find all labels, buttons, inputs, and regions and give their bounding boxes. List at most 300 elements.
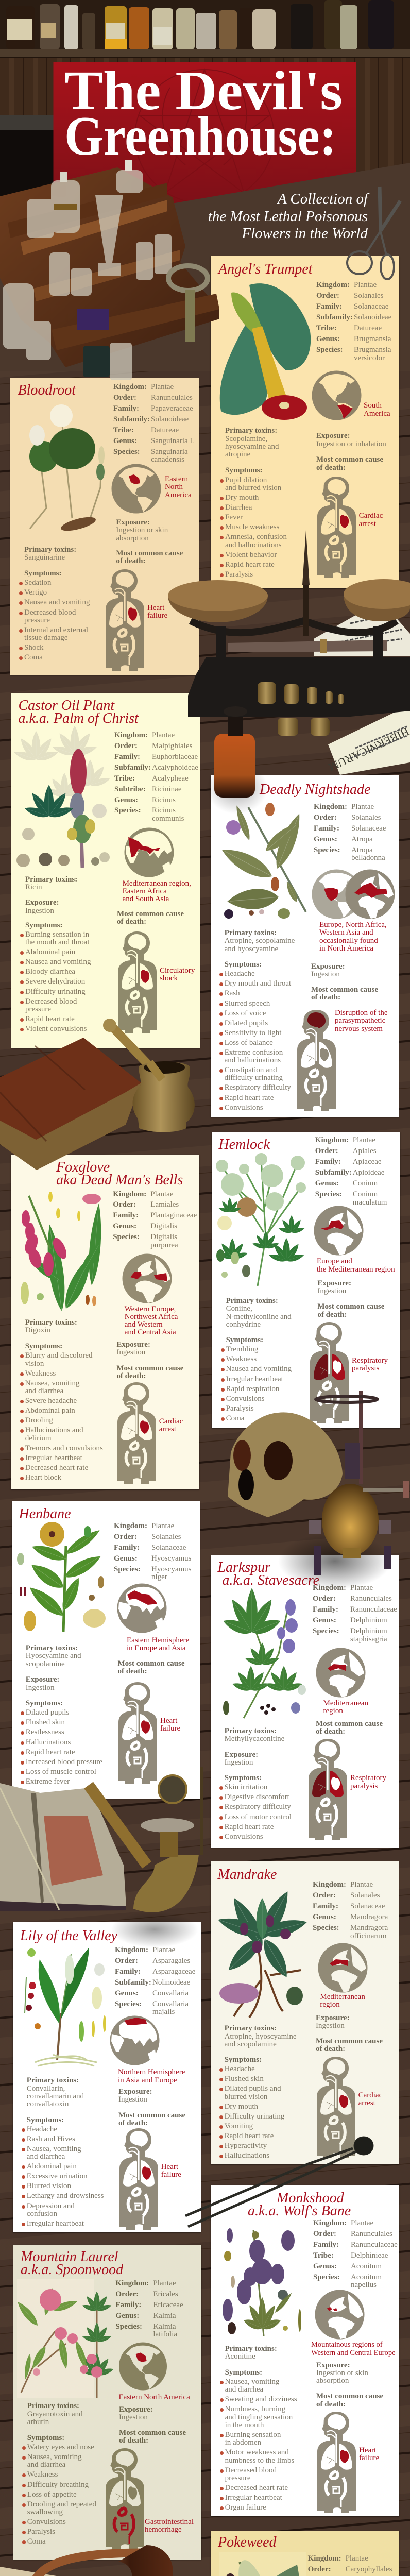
taxonomy: Species:: [115, 2000, 142, 2008]
primary toxins: scopolamine: [26, 1660, 65, 1668]
icon: scissors: [347, 187, 400, 279]
panel: tilted plank table: [0, 163, 410, 371]
region label: and South Asia: [123, 895, 169, 903]
exposure: Exposure:: [316, 2361, 350, 2369]
symptoms: [225, 2369, 297, 2514]
region label: occasionally found: [319, 937, 378, 945]
primary toxins: Primary toxins:: [225, 2024, 277, 2032]
exposure: [118, 2088, 152, 2104]
body diagram: heart: [106, 569, 144, 671]
symptoms: in abdomen: [225, 2438, 261, 2447]
exposure: [316, 2362, 368, 2385]
cause label: arrest: [159, 1425, 176, 1433]
primary toxins: Primary toxins:: [225, 2345, 277, 2353]
cause label: [359, 512, 383, 528]
cause label: nervous system: [335, 1025, 383, 1033]
symptoms: Respiratory difficulty: [225, 1083, 291, 1092]
symptoms: Rapid heart rate: [225, 1823, 274, 1831]
symptoms: [25, 1343, 103, 1484]
symptoms: Hallucinations and: [25, 1426, 83, 1434]
symptoms: Rapid respiration: [226, 1385, 279, 1393]
symptoms: Depression and: [27, 2202, 75, 2210]
taxonomy: Hyoscyamus: [151, 1565, 192, 1573]
primary toxins: Sanguinarine: [24, 553, 65, 562]
cause label: Gastrointestinal: [145, 2517, 194, 2526]
primary toxins: Primary toxins:: [27, 2076, 79, 2084]
taxonomy: Order:: [115, 2290, 139, 2298]
body diagram: lungs: [310, 1322, 349, 1423]
plant illustration: mountain laurel: [17, 2279, 111, 2398]
cause label: Heart: [161, 2163, 178, 2171]
taxonomy: maculatum: [353, 1198, 387, 1207]
taxonomy: Species:: [314, 846, 340, 854]
primary toxins: [226, 1297, 292, 1329]
symptoms: Nausea, vomiting: [25, 1379, 80, 1387]
region label: Eastern: [165, 475, 188, 483]
taxonomy: Order:: [114, 742, 138, 750]
symptoms: Drooling: [25, 1416, 53, 1425]
taxonomy: [113, 383, 195, 464]
taxonomy: Order:: [115, 1957, 138, 1965]
region label: Mediterranean: [323, 1699, 368, 1707]
taxonomy: Digitalis: [150, 1222, 177, 1230]
primary toxins: Grayanotoxin and: [27, 2410, 83, 2418]
taxonomy: Ranunculaceae: [350, 1605, 397, 1614]
cause label: [359, 2447, 379, 2463]
cause label: Cardiac: [359, 512, 383, 520]
symptoms: in the mouth: [225, 2421, 264, 2429]
primary toxins: Methyllycaconitine: [225, 1735, 284, 1743]
region label: Western and Central Europe: [311, 2349, 396, 2357]
cause label: paralysis: [350, 1782, 378, 1790]
cause label: shock: [160, 974, 178, 982]
region label: in North America: [319, 944, 373, 953]
symptoms: and diarrhea: [27, 2461, 65, 2469]
taxonomy: napellus: [351, 2281, 377, 2289]
region label: Mountainous regions of: [311, 2341, 383, 2349]
taxonomy: Plantae: [350, 1584, 373, 1592]
decorative paper under nightshade panel: HIBERNICARUM: [327, 725, 410, 774]
cause of death heading: Most common cause: [311, 986, 378, 994]
cause of death heading: of death:: [118, 2119, 148, 2127]
primary toxins: [225, 427, 279, 459]
globe: Mediterranean: [318, 1943, 368, 1993]
taxonomy: staphisagria: [350, 1635, 387, 1643]
taxonomy: Family:: [114, 1544, 140, 1552]
cause label: parasympathetic: [335, 1016, 385, 1025]
panel: Deadly Nightshade: [211, 775, 399, 1117]
taxonomy: Order:: [113, 1200, 136, 1209]
exposure: [316, 432, 386, 448]
symptoms: Flushed skin: [26, 1718, 65, 1726]
region label: Eastern Africa: [123, 887, 167, 895]
taxonomy: Order:: [314, 814, 337, 822]
taxonomy: Tribe:: [316, 324, 337, 332]
cause label: Respiratory: [352, 1357, 388, 1365]
symptoms: Nausea, vomiting: [225, 2378, 279, 2386]
panel: Mandrake: [211, 1861, 399, 2164]
taxonomy: Kingdom:: [308, 2554, 341, 2563]
cause of death heading: [116, 549, 183, 565]
photo: wooden lab rack with glassware: [0, 160, 219, 380]
taxonomy: Apioideae: [353, 1168, 384, 1177]
cause label: [350, 1774, 386, 1790]
taxonomy: Datureae: [151, 426, 179, 434]
taxonomy: Order:: [113, 394, 136, 402]
symptoms: Vertigo: [24, 588, 47, 597]
heading: Bloodroot: Bloodroot: [18, 382, 76, 398]
exposure: Ingestion: [316, 2022, 345, 2030]
panel: Pokeweed: [211, 2531, 399, 2576]
taxonomy: Ericaceae: [153, 2301, 183, 2309]
globe: Mediterranean, Africa, South Asia: [125, 827, 174, 877]
heading: Pokeweed: Pokeweed: [218, 2534, 276, 2550]
taxonomy: Kingdom:: [113, 1190, 146, 1198]
taxonomy: Family:: [115, 2301, 141, 2309]
taxonomy: Apiales: [353, 1147, 377, 1155]
taxonomy: Order:: [316, 292, 339, 300]
taxonomy: Caryophyllales: [346, 2565, 392, 2573]
taxonomy: Plantaginaceae: [150, 1211, 197, 1219]
symptoms: Pupil dilation: [225, 476, 267, 484]
cause label: [145, 2518, 194, 2534]
taxonomy: Family:: [313, 2241, 339, 2249]
cause of death heading: of death:: [316, 2400, 346, 2409]
region label: and Western: [125, 1320, 163, 1329]
body diagram: heart: [118, 1682, 157, 1784]
region label: [323, 1699, 368, 1715]
plant illustration: larkspur: [217, 1592, 310, 1719]
body diagram: heart: [119, 2128, 158, 2230]
exposure: Exposure:: [311, 962, 345, 971]
region label: [125, 1306, 178, 1337]
photo: old book: [0, 1038, 141, 1170]
taxonomy: Plantae: [354, 281, 377, 289]
taxonomy: Atropa: [351, 846, 373, 854]
symptoms: Nausea, vomiting: [27, 2145, 81, 2153]
cause of death heading: [316, 2038, 383, 2054]
primary toxins: and scopolamine: [225, 2040, 277, 2048]
taxonomy: Order:: [315, 1147, 338, 1155]
taxonomy: [313, 2219, 398, 2292]
plant illustration: mandrake: [218, 1883, 308, 2019]
taxonomy: Subfamily:: [315, 1168, 352, 1177]
primary toxins: Primary toxins:: [225, 427, 277, 435]
body diagram: lungs: [309, 1739, 347, 1840]
cause of death heading: [316, 2393, 383, 2409]
body diagram: heart: [118, 931, 157, 1033]
region label: Western Asia and: [319, 928, 373, 937]
primary toxins: [27, 2402, 83, 2426]
symptoms: Muscle weakness: [225, 523, 279, 531]
photo: black tweezers: [185, 2137, 373, 2227]
symptoms: Abdominal pain: [25, 1406, 75, 1415]
symptoms: Vomiting: [225, 2122, 253, 2130]
taxonomy: latifolia: [153, 2330, 177, 2338]
symptoms: [219, 960, 292, 1112]
taxonomy: Family:: [113, 1211, 139, 1219]
symptoms: Headache: [27, 2125, 57, 2133]
cause of death heading: [311, 986, 378, 1002]
taxonomy: Family:: [113, 404, 139, 413]
symptoms: Hallucinations: [225, 2151, 269, 2160]
symptoms: and diarrhea: [25, 1387, 63, 1395]
symptoms: Abdominal pain: [27, 2162, 77, 2171]
symptoms: Decreased blood: [225, 2466, 277, 2475]
region label: [127, 1637, 189, 1652]
taxonomy: [313, 1584, 397, 1647]
decorative paper under nightshade panel: [327, 705, 410, 775]
taxonomy: Solanaceae: [354, 302, 388, 311]
symptoms: [27, 2116, 104, 2230]
symptoms: [20, 921, 91, 1033]
symptoms: Burning sensation in: [25, 930, 89, 939]
symptoms: and tingling sensation: [225, 2413, 293, 2421]
heading: Castor Oil Plant: a.k.a. Palm of Christ: [19, 710, 139, 726]
symptoms: Weakness: [27, 2470, 58, 2479]
taxonomy: Delphinium: [350, 1627, 387, 1635]
symptoms: Amnesia, confusion: [225, 533, 287, 541]
panel: Monkshood: [211, 2185, 399, 2516]
primary toxins: [26, 1645, 81, 1668]
cause of death heading: of death:: [311, 993, 340, 1002]
taxonomy: Genus:: [115, 1989, 139, 1997]
panel: Mountain Laurel: [13, 2245, 201, 2560]
primary toxins: N-methylconiine and: [226, 1313, 292, 1321]
taxonomy: Solanoideae: [354, 313, 391, 321]
exposure: [116, 518, 168, 543]
globe: Northern Asia and Europe: [110, 2015, 160, 2065]
cause of death heading: of death:: [316, 464, 346, 472]
heading: Foxglove: [56, 1160, 183, 1186]
cause label: Disruption of the: [335, 1009, 387, 1017]
symptoms: Decreased heart rate: [25, 1464, 88, 1472]
exposure: Ingestion: [116, 1348, 145, 1357]
body diagram: brain: [297, 1010, 336, 1111]
plant illustration: bloodroot: [29, 404, 105, 531]
taxonomy: [308, 2555, 393, 2576]
exposure: [119, 2406, 153, 2421]
primary toxins: [225, 2025, 297, 2048]
primary toxins: Atropine, scopolamine: [225, 937, 295, 945]
primary toxins: Aconitine: [225, 2352, 255, 2361]
symptoms: Symptoms:: [225, 466, 263, 474]
cause of death heading: Most common cause: [117, 910, 184, 918]
symptoms: [225, 2056, 284, 2162]
cause of death heading: of death:: [116, 557, 145, 565]
symptoms: Slurred speech: [225, 999, 270, 1008]
body diagram: heart: [117, 1382, 156, 1484]
exposure: Ingestion or skin: [316, 2369, 368, 2377]
primary toxins: Primary toxins:: [25, 875, 77, 884]
exposure: Ingestion or inhalation: [316, 440, 386, 448]
symptoms: Coma: [24, 653, 43, 662]
heading: Henbane: Henbane: [19, 1506, 71, 1522]
taxonomy: Genus:: [114, 1554, 138, 1563]
symptoms: and diarrhea: [27, 2153, 65, 2161]
taxonomy: Family:: [313, 1605, 338, 1614]
taxonomy: Asparagales: [152, 1957, 190, 1965]
cause label: paralysis: [352, 1364, 379, 1372]
taxonomy: Kingdom:: [115, 1946, 148, 1954]
taxonomy: Genus:: [313, 1616, 336, 1624]
panel: Angel's Trumpet: [211, 256, 399, 588]
symptoms: Loss of balance: [225, 1039, 273, 1047]
region label: in Asia and Europe: [118, 2076, 177, 2084]
primary toxins: [225, 929, 295, 953]
region label: Northern Hemisphere: [118, 2068, 185, 2076]
symptoms: difficulty urinating: [225, 1074, 283, 1082]
symptoms: Burning sensation: [225, 2431, 281, 2439]
cause of death heading: [117, 1660, 184, 1676]
taxonomy: [316, 281, 391, 362]
cause label: Heart: [147, 604, 164, 612]
cause label: failure: [147, 612, 167, 620]
taxonomy: Kalmia: [153, 2312, 176, 2320]
taxonomy: Nolinoideae: [152, 1978, 190, 1987]
taxonomy: belladonna: [351, 854, 385, 862]
taxonomy: Kingdom:: [114, 1522, 147, 1530]
taxonomy: Tribe:: [313, 2251, 334, 2260]
taxonomy: Order:: [313, 2230, 336, 2238]
symptoms: Dilated pupils and: [225, 2084, 281, 2093]
symptoms: Weakness: [226, 1355, 257, 1363]
cause of death heading: of death:: [117, 918, 146, 926]
cause label: failure: [359, 2454, 379, 2462]
symptoms: blurred vision: [225, 2093, 267, 2101]
taxonomy: Ranunculales: [151, 394, 193, 402]
symptoms: Symptoms:: [226, 1336, 263, 1344]
taxonomy: Mandragora: [350, 1924, 388, 1932]
exposure: [116, 1341, 150, 1357]
heading: Angel's Trumpet: Angel's Trumpet: [218, 261, 313, 277]
taxonomy: Family:: [115, 1968, 141, 1976]
cause of death heading: Most common cause: [119, 2429, 186, 2437]
taxonomy: Solanales: [354, 292, 383, 300]
taxonomy: Family:: [315, 1158, 341, 1166]
photo: balance scale with weights: [168, 530, 410, 736]
symptoms: Coma: [27, 2537, 46, 2546]
heading: Mountain Laurel: Mountain Laurel: [21, 2248, 118, 2265]
symptoms: Nausea and vomiting: [25, 958, 91, 966]
taxonomy: Mandragora: [350, 1913, 388, 1921]
globe: Europe and Asia: [117, 1583, 167, 1633]
taxonomy: Ricininae: [152, 785, 181, 793]
heading: Castor Oil Plant: Castor Oil Plant: [19, 698, 114, 714]
cause of death heading: of death:: [316, 2045, 345, 2053]
taxonomy: Ricinus: [152, 806, 176, 815]
cause of death heading: Most common cause: [317, 1302, 384, 1311]
symptoms: Internal and external: [24, 626, 88, 634]
symptoms: Symptoms:: [225, 960, 262, 969]
primary toxins: arbutin: [27, 2418, 49, 2426]
globe: Mediterranean: [316, 1648, 366, 1698]
symptoms: Sensitivity to light: [225, 1029, 281, 1037]
taxonomy: [114, 1522, 192, 1584]
taxonomy: Solanaceae: [351, 824, 386, 833]
primary toxins: Atropine, hyoscyamine: [225, 2032, 297, 2041]
taxonomy: Species:: [114, 806, 141, 815]
symptoms: pressure: [25, 1005, 51, 1013]
taxonomy: purpurea: [150, 1241, 178, 1249]
taxonomy: Genus:: [114, 795, 138, 804]
symptoms: Hallucinations: [26, 1738, 71, 1747]
symptoms: Skin irritation: [225, 1783, 267, 1791]
symptoms: Loss of voice: [225, 1009, 266, 1018]
taxonomy: canadensis: [151, 455, 184, 464]
primary toxins: [24, 546, 76, 562]
body diagram: heart: [317, 477, 356, 578]
taxonomy: Genus:: [115, 2312, 139, 2320]
plant illustration: pokeweed: [219, 2552, 306, 2576]
symptoms: Organ failure: [225, 2503, 266, 2512]
taxonomy: Digitalis: [150, 1233, 177, 1241]
taxonomy: Solanales: [350, 1891, 380, 1900]
symptoms: Blurred vision: [27, 2182, 71, 2190]
taxonomy: Subfamily:: [316, 313, 353, 321]
symptoms: Decreased blood: [25, 997, 77, 1006]
taxonomy: Aconitum: [351, 2273, 382, 2281]
symptoms: Irregular heartbeat: [27, 2219, 84, 2228]
symptoms: delirium: [25, 1434, 52, 1443]
exposure: Exposure:: [116, 518, 150, 527]
taxonomy: [313, 1881, 388, 1943]
taxonomy: Genus:: [313, 2262, 337, 2270]
heading: Deadly Nightshade: Deadly Nightshade: [260, 781, 370, 798]
exposure: Exposure:: [25, 899, 59, 907]
taxonomy: Apiaceae: [353, 1158, 382, 1166]
symptoms: Rapid heart rate: [225, 561, 275, 569]
cause label: hemorrhage: [145, 2526, 182, 2534]
cause of death heading: Most common cause: [316, 2392, 383, 2400]
taxonomy: [115, 1946, 195, 2019]
taxonomy: [113, 1190, 197, 1252]
primary toxins: Hyoscyamine and: [26, 1652, 81, 1660]
panel: Foxglove: [11, 1155, 199, 1489]
panel: Lily of the Valley: [13, 1922, 201, 2232]
symptoms: Difficulty urinating: [225, 2112, 284, 2121]
region label: America: [364, 410, 390, 418]
photo: newspaper under scale: [314, 601, 410, 656]
shadow on Larkspur and Lily panels: [111, 762, 391, 2576]
region label: Northwest Africa: [125, 1313, 178, 1321]
taxonomy: versicolor: [354, 354, 385, 362]
cause of death heading: Most common cause: [316, 455, 383, 464]
taxonomy: Family:: [314, 824, 339, 833]
taxonomy: Subfamily:: [115, 1978, 151, 1987]
primary toxins: hyoscyamine and: [225, 443, 279, 451]
taxonomy: Plantae: [353, 1136, 375, 1144]
taxonomy: Order:: [114, 1533, 137, 1541]
taxonomy: Tribe:: [113, 426, 134, 434]
region label: Europe, North Africa,: [319, 921, 387, 929]
cause of death heading: of death:: [117, 1667, 147, 1675]
taxonomy: Family:: [316, 302, 342, 311]
cause label: [358, 2092, 382, 2108]
body diagram: heart: [317, 2057, 355, 2158]
taxonomy: Kingdom:: [313, 1880, 346, 1889]
region label: Western Europe,: [125, 1305, 176, 1313]
plant illustration: deadly nightshade: [222, 803, 307, 919]
taxonomy: Species:: [313, 1627, 339, 1635]
symptoms: Convulsions: [226, 1395, 265, 1403]
taxonomy: Family:: [313, 1902, 338, 1910]
globe: Europe and Africa: [345, 870, 395, 919]
symptoms: Excessive urination: [27, 2172, 88, 2180]
globe: South America: [312, 371, 362, 420]
symptoms: Lethargy and drowsiness: [27, 2192, 104, 2200]
symptoms: Headache: [225, 2065, 255, 2073]
